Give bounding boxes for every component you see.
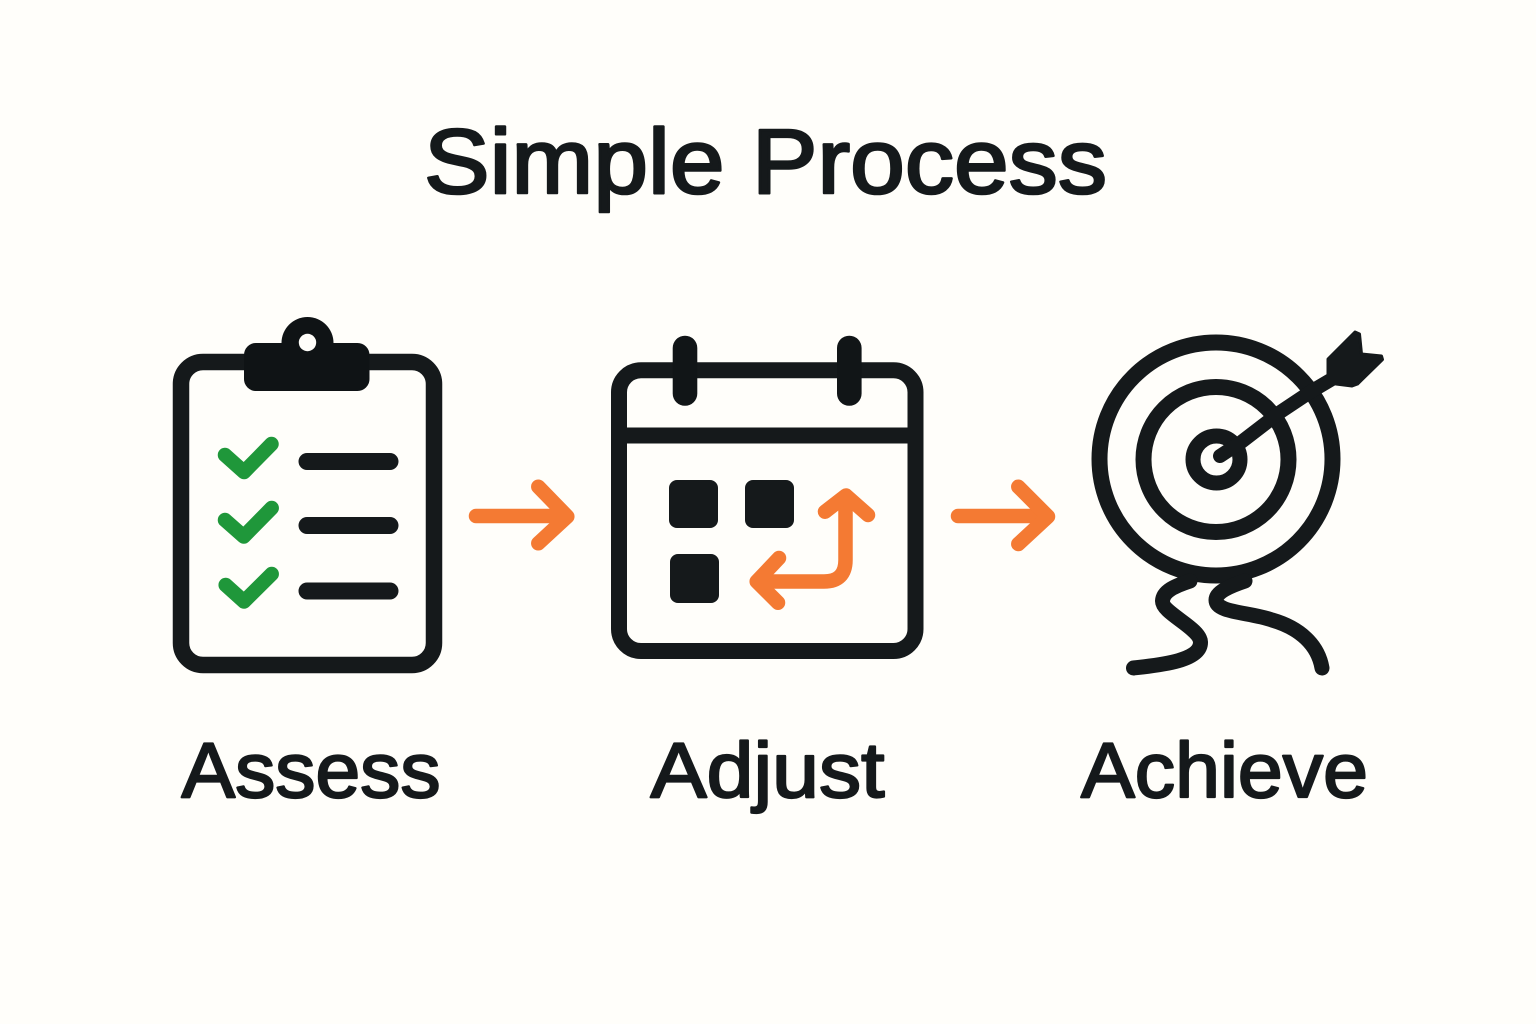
checklist lines	[307, 462, 390, 591]
calendar squares	[669, 480, 794, 603]
title: Simple Process	[424, 111, 1107, 213]
arrow: assess to adjust	[476, 487, 567, 543]
icon: target	[1100, 332, 1382, 668]
label: Assess: Assess	[182, 726, 440, 814]
checklist ticks	[225, 444, 272, 602]
arrow: adjust to achieve	[958, 487, 1048, 544]
adjust arrows	[757, 496, 868, 603]
label: Achieve: Achieve	[1081, 726, 1368, 814]
arrow fletching	[1328, 332, 1382, 386]
label: Adjust: Adjust	[650, 726, 885, 814]
arrow in target	[1220, 378, 1333, 456]
icon: calendar	[619, 348, 916, 651]
icon: clipboard	[181, 317, 434, 665]
target stand	[1134, 581, 1322, 668]
